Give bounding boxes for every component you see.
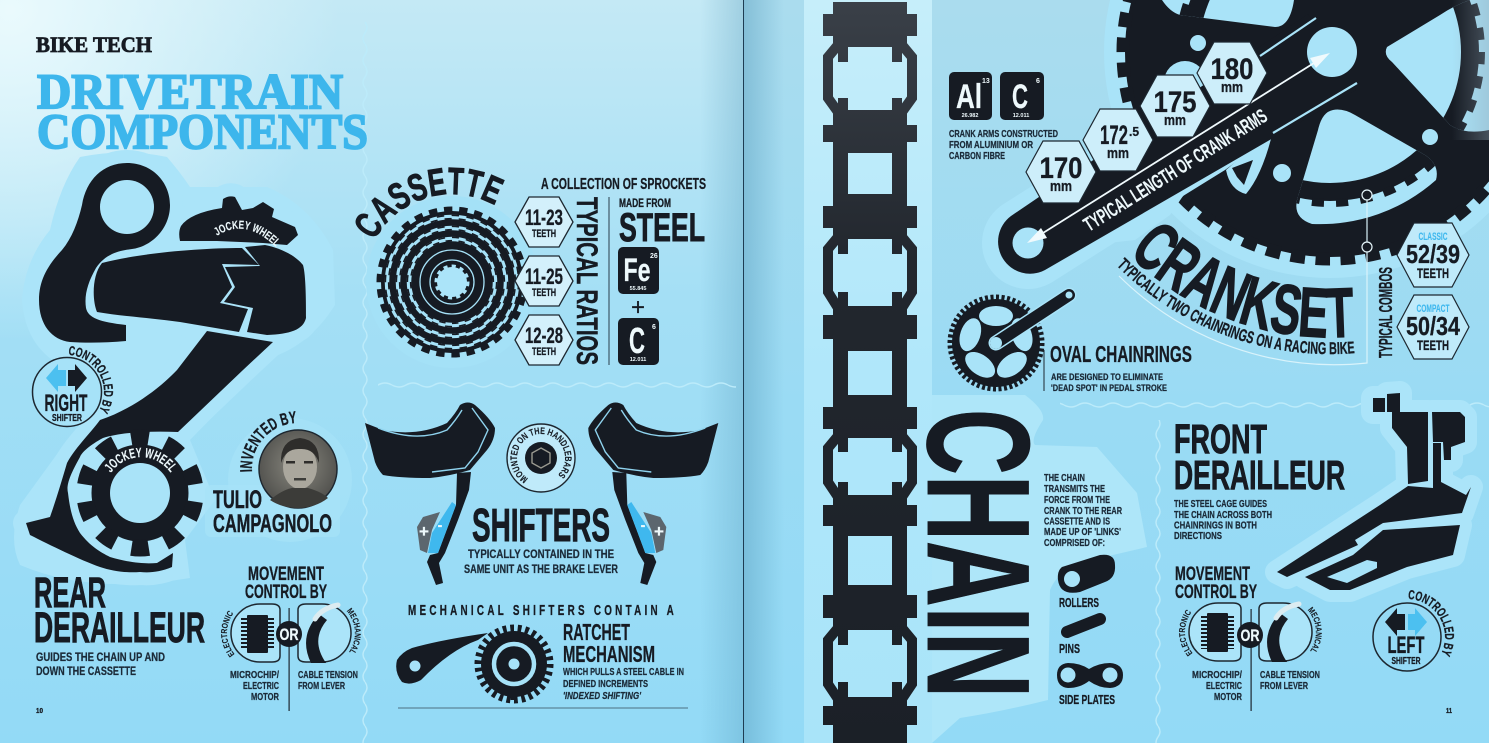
icon: or: OR — [1240, 626, 1260, 645]
element tile: carbon: 6 — [652, 324, 656, 331]
hexagon: classic 52/39 — [1397, 223, 1469, 287]
portrait: tulio campagnolo: INVENTED BY — [240, 411, 296, 472]
illustration: right brake lever shifter — [588, 402, 718, 585]
icon: side plate — [1057, 663, 1123, 707]
icon: or — [1237, 622, 1263, 648]
text: front derailleur description: THE CHAIN ACROSS BOTH — [1174, 509, 1272, 521]
heading: ratchet mechanism: RATCHET — [563, 619, 630, 645]
text: crank arm materials: CARBON FIBRE — [949, 151, 1005, 162]
badge: right shifter: SHIFTER — [52, 413, 83, 424]
page number: 11 — [1446, 708, 1452, 715]
text: chain description: TRANSMITS THE — [1044, 483, 1105, 495]
heading: movement control by: CONTROL BY — [245, 582, 327, 603]
text: rear derailleur description — [36, 650, 165, 678]
plus sign: + — [631, 294, 645, 321]
element tile: carbon: 12.011 — [1013, 113, 1029, 119]
element tile: aluminium: 26.982 — [962, 113, 978, 119]
text: chain description: THE CHAIN — [1044, 472, 1085, 484]
hexagon: 12-28 teeth — [515, 315, 573, 365]
illustration: crank arm — [998, 14, 1357, 274]
illustration: ratchet and pawl — [396, 628, 550, 700]
icon: side plate: SIDE PLATES — [1059, 692, 1115, 707]
text: ratchet description: WHICH PULLS A STEEL CABLE IN — [563, 667, 684, 678]
icon: or — [276, 621, 302, 647]
badge: left shifter: SHIFTER — [1392, 656, 1421, 667]
text: ratchet description: DEFINED INCREMENTS — [563, 679, 648, 690]
hexagon: 11-23 teeth: TEETH — [532, 228, 556, 240]
badge: right shifter: RIGHT — [44, 390, 88, 417]
heading: movement control by: MOVEMENT — [1175, 564, 1250, 585]
upper jockey wheel label: JOCKEY WHEEL — [214, 220, 279, 247]
icon: mechanical cable: MECHANICAL — [346, 608, 361, 653]
hexagon: 180 mm: mm — [1221, 79, 1243, 96]
label: cable tension from lever — [1260, 669, 1320, 692]
rear derailleur halo — [26, 163, 306, 572]
icon: or: OR — [280, 625, 298, 644]
hexagon: classic 52/39: 52/39 — [1406, 239, 1460, 269]
text: shifters description: SAME UNIT AS THE BRAKE LEVER — [464, 564, 619, 576]
icon: pin — [1059, 619, 1100, 656]
chainring windows — [1150, 0, 1489, 235]
text: chain description: CASSETTE AND IS — [1044, 516, 1110, 528]
heading: movement control by — [1175, 564, 1257, 603]
hexagon: compact 50/34: 50/34 — [1406, 311, 1460, 341]
hexagon: 172.5 mm: .5 — [1129, 124, 1139, 139]
hexagon: 172.5 mm — [1083, 109, 1153, 171]
element tile: iron: Fe — [624, 252, 650, 288]
label: microchip electric motor: MICROCHIP/ — [230, 669, 279, 681]
text: typically two chainrings: TYPICALLY TWO CHAINRINGS ON A RACING BIKE — [1118, 257, 1355, 354]
vertical label: typical ratios: TYPICAL RATIOS — [570, 197, 603, 365]
text: ratchet description: 'INDEXED SHIFTING' — [563, 691, 641, 702]
panel: front derailleur — [1174, 381, 1483, 715]
label: microchip electric motor: ELECTRIC — [243, 680, 279, 692]
panel: cassette — [356, 167, 706, 366]
hexagon: compact 50/34 — [1397, 295, 1469, 359]
hexagon: 180 mm — [1197, 42, 1267, 104]
icon: sprocket cassette — [380, 210, 524, 354]
label: microchip electric motor: MOTOR — [1214, 691, 1242, 703]
hexagon: 11-23 teeth — [515, 197, 573, 247]
hexagon: 11-25 teeth: TEETH — [532, 287, 556, 299]
hexagon: classic 52/39: CLASSIC — [1418, 231, 1448, 243]
label: cable tension from lever: CABLE TENSION — [298, 669, 358, 681]
text: rear derailleur description: GUIDES THE CHAIN UP AND — [36, 650, 165, 664]
text: front derailleur description: DIRECTIONS — [1174, 530, 1222, 542]
illustration: right brake lever shifter: - — [641, 517, 646, 533]
label: cable tension from lever: CABLE TENSION — [1260, 669, 1320, 681]
section label: bike tech: BIKE TECH — [36, 32, 152, 57]
rear derailleur blob — [14, 152, 335, 584]
heading: movement control by: CONTROL BY — [1175, 582, 1257, 603]
label: microchip electric motor — [230, 669, 279, 703]
illustration: chain column — [823, 2, 917, 743]
hexagon: 172.5 mm: 172 — [1100, 120, 1128, 150]
heading: movement control by — [245, 564, 327, 603]
icon: electronic microchip: ELECTRONIC — [1179, 610, 1192, 656]
heading: movement control by: MOVEMENT — [248, 564, 324, 585]
icon: lower jockey wheel — [77, 432, 203, 556]
icon: mechanical cable — [297, 602, 361, 663]
heading: crankset: CRANKSET — [1136, 224, 1353, 338]
illustration: front derailleur — [1277, 393, 1471, 590]
hexagon: 175 mm: mm — [1164, 112, 1186, 129]
hexagon: 170 mm: mm — [1050, 178, 1072, 195]
text: chain description: FORCE FROM THE — [1044, 494, 1110, 506]
text: chain description — [1044, 472, 1122, 549]
text: crank arm materials: FROM ALUMINIUM OR — [949, 140, 1034, 151]
text: shifters description — [464, 549, 619, 576]
hexagon: 175 mm — [1140, 75, 1210, 137]
hexagon: compact 50/34: COMPACT — [1416, 303, 1450, 315]
text: shifters description: TYPICALLY CONTAINED IN THE — [468, 549, 614, 561]
hexagon: 175 mm: 175 — [1154, 86, 1196, 119]
element tile: aluminium: 13 — [982, 78, 990, 85]
element tile: carbon: C — [629, 320, 645, 361]
element tile: iron: 26 — [650, 253, 658, 260]
heading: cassette: CASSETTE — [356, 167, 505, 236]
title: drivetrain components: DRIVETRAIN — [37, 63, 343, 119]
text: chain description: COMPRISED OF: — [1044, 537, 1105, 549]
text: front derailleur description: CHAINRINGS IN BOTH — [1174, 520, 1257, 532]
front derailleur halo — [1277, 393, 1471, 590]
text: made from steel: MADE FROM — [619, 198, 671, 210]
leader line: chainring callout — [1119, 190, 1372, 365]
label: cable tension from lever: FROM LEVER — [298, 680, 345, 692]
hexagon: 170 mm: 170 — [1040, 152, 1082, 185]
heading: ratchet mechanism — [563, 619, 655, 667]
text: crank arm materials — [949, 129, 1058, 162]
element tile: aluminium — [949, 72, 992, 120]
badge: left shifter — [1372, 590, 1454, 672]
icon: electronic microchip — [1179, 602, 1242, 662]
hexagon: compact 50/34: TEETH — [1417, 337, 1449, 353]
hexagon: 11-23 teeth: 11-23 — [525, 205, 563, 230]
badge: mounted on the handlebars: MOUNTED ON THE HANDLEBARS — [510, 427, 572, 484]
heading: rear derailleur: REAR — [34, 569, 106, 617]
text: made from steel: STEEL — [619, 206, 705, 250]
text: front derailleur description: THE STEEL CAGE GUIDES — [1174, 498, 1267, 510]
badge: left shifter: LEFT — [1388, 632, 1425, 659]
hexagon: 12-28 teeth: TEETH — [532, 346, 556, 358]
element tile: carbon: C — [1012, 78, 1028, 116]
heading: front derailleur: FRONT — [1174, 416, 1267, 462]
text: crank arm materials: CRANK ARMS CONSTRUCTED — [949, 129, 1058, 140]
illustration: left brake lever shifter — [365, 402, 495, 585]
panel: shifters — [365, 402, 718, 708]
hexagon: classic 52/39: TEETH — [1417, 265, 1449, 281]
text: oval chainrings description: 'DEAD SPOT' IN PEDAL STROKE — [1051, 383, 1167, 394]
crankset halo — [1028, 0, 1489, 278]
heading: ratchet mechanism: MECHANISM — [563, 641, 655, 667]
element tile: aluminium: Al — [956, 78, 982, 116]
heading: crankset — [1136, 224, 1353, 338]
text: ratchet description — [563, 667, 684, 702]
icon: pin: PINS — [1059, 641, 1080, 656]
panel: rear movement control — [221, 564, 361, 711]
text: oval chainrings description: ARE DESIGNED TO ELIMINATE — [1051, 372, 1163, 383]
hexagon: 11-25 teeth: 11-25 — [525, 264, 563, 289]
element tile: iron: 55.845 — [630, 286, 646, 292]
hexagon: 180 mm: 180 — [1210, 53, 1254, 86]
title: drivetrain components — [37, 63, 368, 159]
heading: front derailleur — [1174, 416, 1345, 498]
text: chain description: CRANK TO THE REAR — [1044, 505, 1122, 517]
hexagon: 12-28 teeth: 12-28 — [525, 323, 563, 348]
portrait: tulio campagnolo: CAMPAGNOLO — [213, 510, 332, 538]
portrait: tulio campagnolo: TULIO — [213, 486, 262, 514]
badge: right shifter — [32, 346, 114, 428]
label: microchip electric motor: MOTOR — [251, 691, 279, 703]
text: made from steel — [619, 198, 705, 250]
element tile: carbon — [1000, 72, 1044, 120]
element tile: carbon: 12.011 — [630, 357, 646, 363]
label: typical length of crank arms: TYPICAL LENGTH OF CRANK ARMS — [1080, 105, 1271, 236]
icon: mechanical cable: MECHANICAL — [1308, 606, 1322, 652]
subheading: mechanical shifters contain a: MECHANICAL SHIFTERS CONTAIN A — [408, 602, 677, 619]
icon: oval chainring — [950, 292, 1072, 389]
subheading: a collection of sprockets: A COLLECTION OF SPROCKETS — [541, 176, 706, 193]
illustration: right brake lever shifter: + — [654, 522, 664, 541]
element tile: iron — [618, 247, 659, 294]
panel: crankset — [982, 0, 1489, 366]
page number: 10 — [36, 708, 43, 715]
badge: left shifter: CONTROLLED BY — [1408, 590, 1454, 658]
illustration: left brake lever shifter: - — [438, 517, 443, 533]
illustration: chainring — [1090, 0, 1489, 259]
panel: oval chainrings — [950, 292, 1192, 394]
label: cable tension from lever: FROM LEVER — [1260, 680, 1308, 692]
label: microchip electric motor: ELECTRIC — [1206, 680, 1242, 692]
label: microchip electric motor — [1192, 669, 1242, 703]
text: oval chainrings description — [1051, 372, 1167, 394]
hexagon: 11-25 teeth — [515, 256, 573, 306]
text: front derailleur description — [1174, 498, 1272, 542]
heading: rear derailleur: DERAILLEUR — [34, 604, 205, 652]
portrait: tulio campagnolo — [207, 411, 340, 542]
panel: rear derailleur — [13, 150, 320, 715]
icon: electronic microchip: ELECTRONIC — [221, 610, 234, 658]
badge: right shifter: CONTROLLED BY — [69, 346, 114, 415]
heading: shifters: SHIFTERS — [472, 499, 610, 551]
heading: oval chainrings: OVAL CHAINRINGS — [1050, 341, 1192, 367]
divider line — [1044, 350, 1045, 391]
hexagon: 170 mm — [1026, 141, 1096, 203]
icon: roller — [1058, 555, 1115, 610]
label: cable tension from lever — [298, 669, 358, 692]
icon: electronic microchip — [221, 603, 281, 663]
hexagon: 172.5 mm: mm — [1107, 145, 1129, 162]
label: microchip electric motor: MICROCHIP/ — [1192, 669, 1242, 681]
element tile: carbon: 6 — [1036, 78, 1040, 85]
divider line — [288, 608, 290, 711]
element tile: carbon — [618, 318, 659, 365]
heading: rear derailleur — [34, 569, 205, 652]
text: chain description: MADE UP OF 'LINKS' — [1044, 526, 1121, 538]
icon: lower jockey wheel: JOCKEY WHEEL — [104, 448, 176, 473]
vertical label: typical combos: TYPICAL COMBOS — [1376, 267, 1396, 358]
text: rear derailleur description: DOWN THE CASSETTE — [36, 664, 136, 678]
divider line — [608, 197, 610, 365]
illustration: left brake lever shifter: + — [419, 522, 429, 541]
icon: roller: ROLLERS — [1059, 595, 1099, 610]
icon: mechanical cable — [1258, 602, 1322, 662]
title: drivetrain components: COMPONENTS — [37, 103, 368, 159]
divider line — [1250, 609, 1252, 711]
arrow: crank length — [1027, 53, 1330, 243]
illustration: rear derailleur body — [26, 163, 306, 572]
heading: front derailleur: DERAILLEUR — [1174, 452, 1345, 498]
